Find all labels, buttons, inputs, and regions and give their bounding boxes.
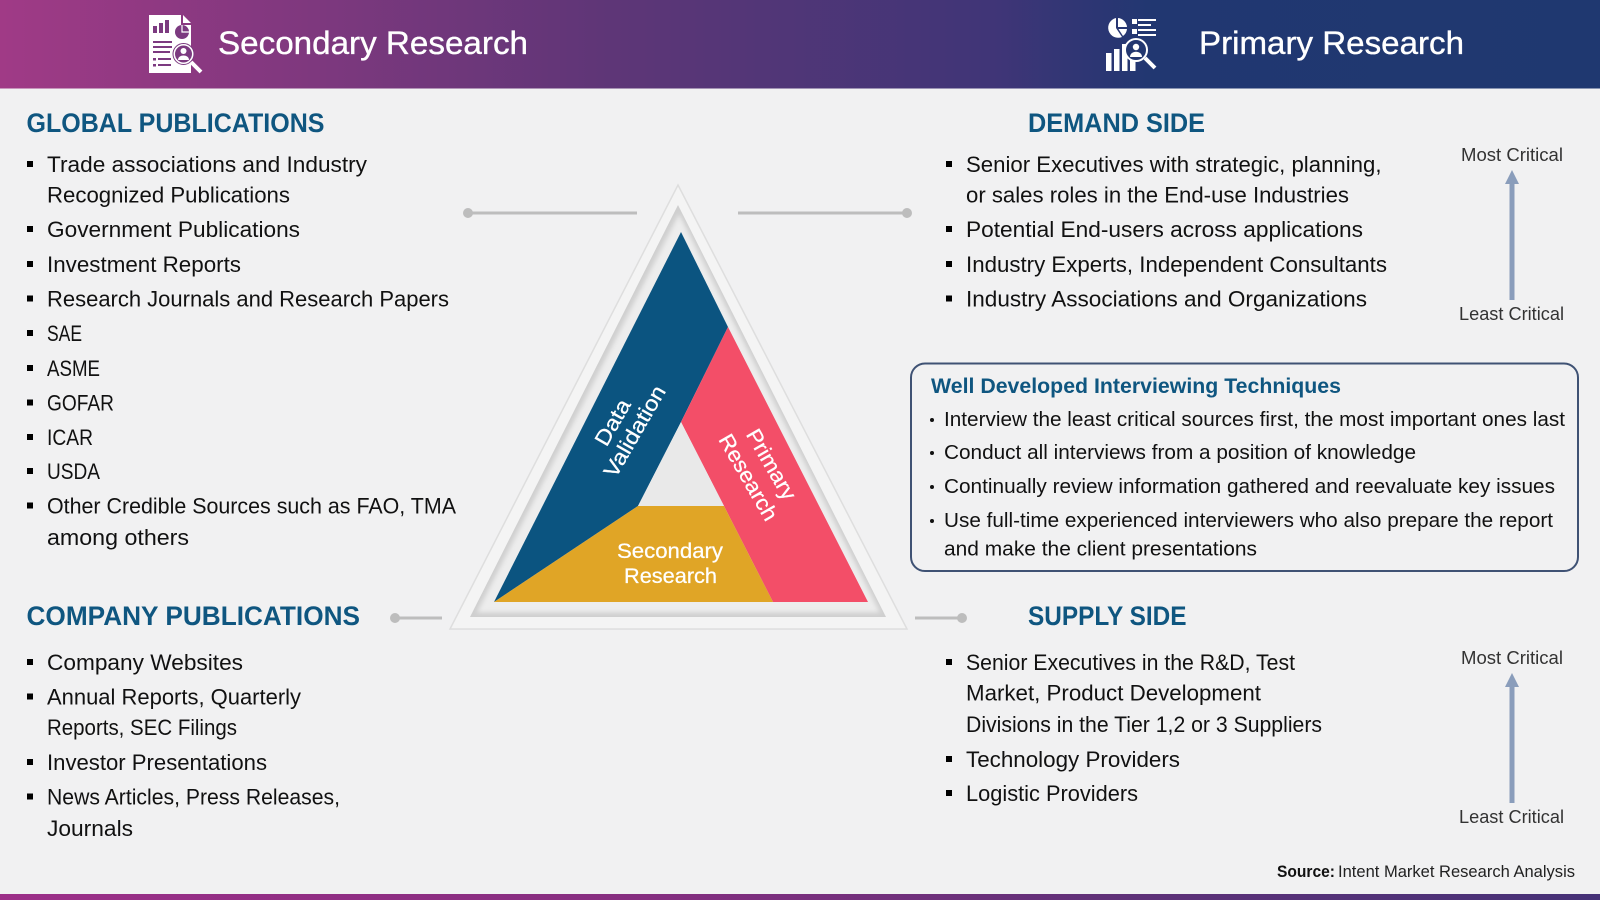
list: interviewing techniques: and make the client presentations (944, 538, 1257, 560)
panel: supply side (946, 601, 1564, 827)
list: demand side sources (946, 152, 1387, 312)
list: company publications sources: Annual Reports, Quarterly (47, 684, 302, 710)
list: supply side sources (946, 650, 1322, 806)
criticality scale: supply side: Most Critical (1461, 647, 1563, 668)
criticality scale: demand side (1459, 144, 1564, 324)
segment: secondary research: Research (624, 564, 717, 588)
list: company publications sources: Reports, SEC Filings (47, 715, 237, 740)
list: supply side sources: Technology Providers (966, 747, 1180, 772)
list: company publications sources: News Articles, Press Releases, (47, 784, 340, 810)
list: company publications sources: Journals (47, 816, 133, 841)
header band (0, 0, 1600, 88)
list: global publications sources: ASME (47, 356, 100, 381)
list: global publications sources: USDA (47, 459, 100, 484)
criticality scale: demand side: Most Critical (1461, 144, 1563, 165)
list: company publications sources: Investor Presentations (47, 750, 267, 775)
criticality scale: demand side: Least Critical (1459, 303, 1564, 324)
list: company publications sources: Company Websites (47, 650, 243, 675)
outer frame triangle (450, 185, 907, 629)
list: global publications sources: Recognized Publications (47, 182, 290, 208)
panel: demand side (946, 108, 1564, 324)
list: interviewing techniques (930, 408, 1565, 560)
list: demand side sources: or sales roles in the End-use Industries (966, 182, 1349, 208)
list: interviewing techniques: Interview the least critical sources first, the most important ones last (944, 408, 1565, 431)
criticality scale: supply side (1459, 647, 1564, 827)
footer band (0, 894, 1600, 900)
segment: primary research: Research (714, 430, 782, 525)
heading: Primary Research: Primary Research (1199, 25, 1464, 61)
list: global publications sources: ICAR (47, 425, 93, 450)
segment: data validation: Validation (599, 381, 671, 482)
heading: demand side: DEMAND SIDE (1028, 108, 1205, 138)
list: global publications sources: Investment Reports (47, 252, 241, 277)
icon: secondary research document (149, 15, 201, 73)
heading: Secondary Research: Secondary Research (218, 25, 528, 61)
segment: primary research: Primary (741, 425, 801, 504)
list: demand side sources: Senior Executives with strategic, planning, (966, 152, 1382, 177)
list: interviewing techniques: Continually review information gathered and reevaluate key issues (944, 475, 1555, 498)
list: global publications sources (27, 152, 456, 550)
center triangle (638, 422, 724, 506)
panel: company publications (26, 601, 360, 841)
list: demand side sources: Potential End-users across applications (966, 217, 1363, 242)
segment: secondary research (494, 506, 773, 602)
heading: global publications: GLOBAL PUBLICATIONS (26, 108, 324, 138)
criticality scale: supply side: Least Critical (1459, 806, 1564, 827)
list: interviewing techniques: Use full-time experienced interviewers who also prepare the report (944, 509, 1553, 532)
segment: primary research (681, 327, 868, 602)
list: demand side sources: Industry Experts, Independent Consultants (966, 252, 1387, 277)
segment: data validation: Data (590, 395, 636, 450)
icon: primary research chart (1106, 18, 1156, 71)
connector lines (390, 208, 966, 622)
list: global publications sources: Research Journals and Research Papers (47, 286, 449, 312)
list: supply side sources: Divisions in the Tier 1,2 or 3 Suppliers (966, 712, 1322, 737)
list: supply side sources: Logistic Providers (966, 781, 1138, 806)
list: global publications sources: GOFAR (47, 390, 114, 416)
list: supply side sources: Market, Product Development (966, 680, 1262, 706)
list: company publications sources (27, 650, 340, 841)
list: global publications sources: SAE (47, 321, 82, 346)
triangle diagram (390, 185, 966, 629)
list: global publications sources: among others (47, 525, 189, 550)
heading: company publications: COMPANY PUBLICATIONS (26, 601, 360, 631)
source note: Source: (1277, 863, 1335, 881)
heading: supply side: SUPPLY SIDE (1028, 601, 1186, 631)
list: global publications sources: Trade associations and Industry (47, 152, 368, 177)
segment: secondary research: Secondary (617, 539, 723, 563)
heading: interviewing techniques: Well Developed Interviewing Techniques (931, 374, 1341, 398)
source note: Intent Market Research Analysis (1338, 863, 1575, 881)
list: demand side sources: Industry Associations and Organizations (966, 286, 1367, 312)
segment: data validation (494, 232, 728, 602)
list: interviewing techniques: Conduct all interviews from a position of knowledge (944, 441, 1416, 464)
list: supply side sources: Senior Executives in the R&D, Test (966, 650, 1296, 675)
panel: global publications (26, 108, 456, 550)
list: global publications sources: Other Credible Sources such as FAO, TMA (47, 494, 456, 518)
list: global publications sources: Government Publications (47, 217, 300, 242)
panel: well developed interviewing techniques (911, 364, 1578, 571)
